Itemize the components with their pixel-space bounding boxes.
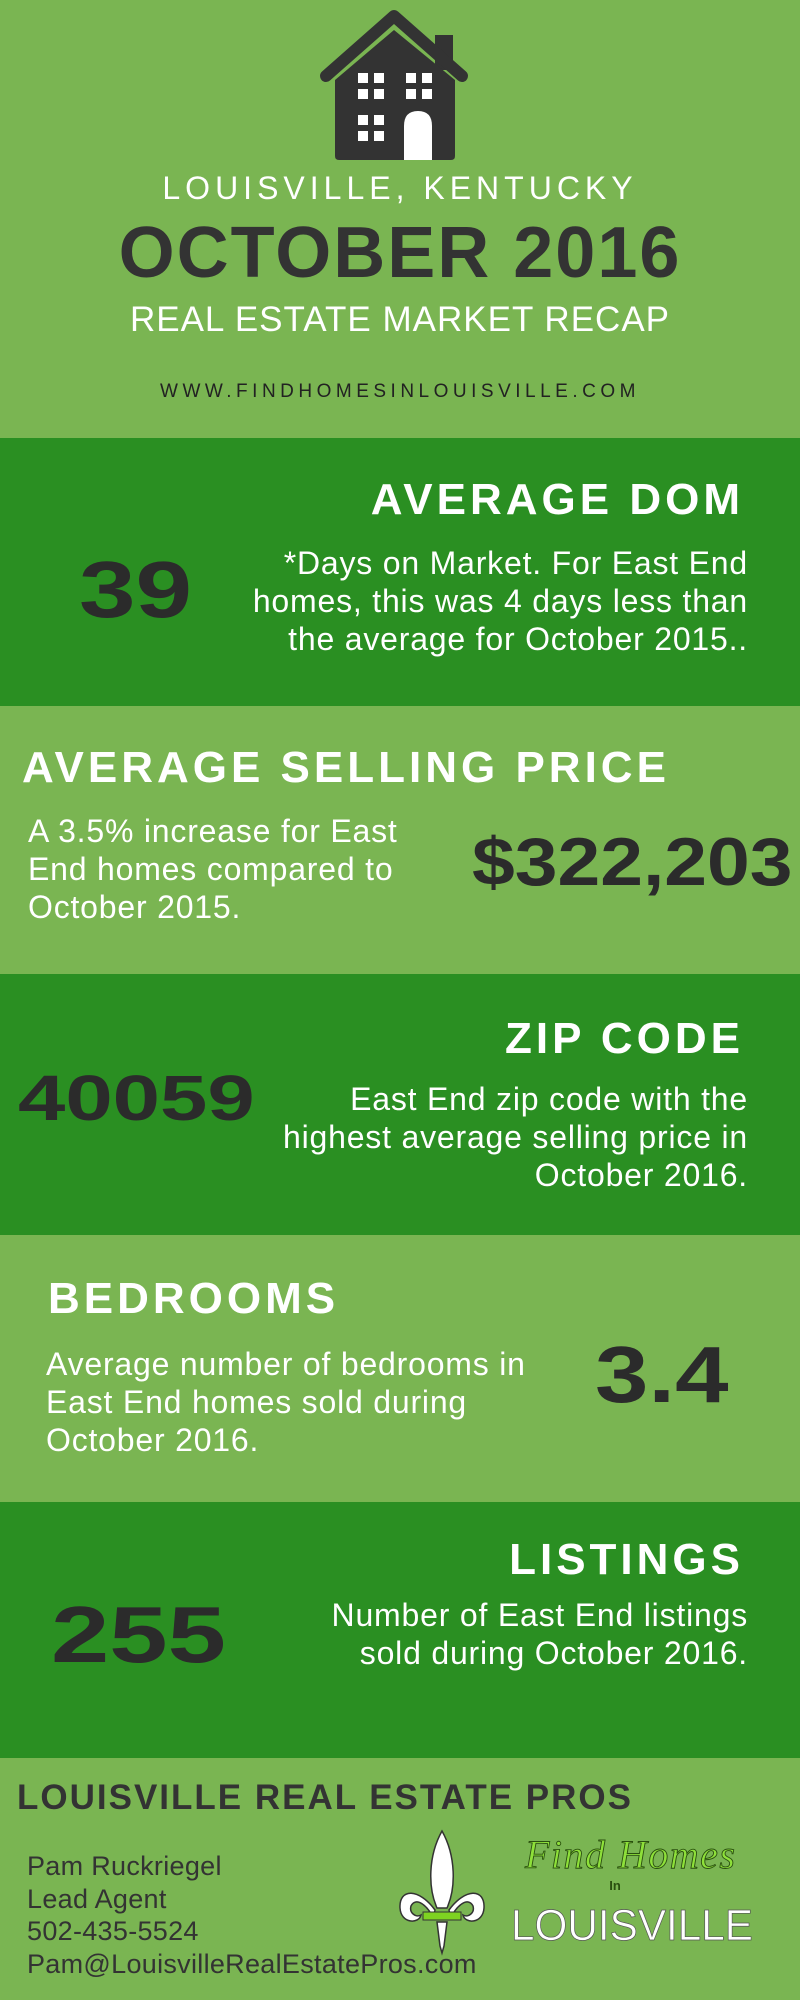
text: [46, 1346, 526, 1458]
icon: fleur-de-lis: [400, 1831, 484, 1953]
text: [332, 1597, 748, 1671]
icon: house: [320, 10, 468, 160]
text: October 2016.: [46, 1422, 259, 1458]
text: Number of East End listings: [332, 1597, 748, 1633]
number: 3.4: [595, 1330, 728, 1419]
text: [253, 545, 748, 657]
heading: ZIP CODE: [505, 1014, 744, 1063]
website: WWW.FINDHOMESINLOUISVILLE.COM: [160, 381, 640, 402]
number: 39: [79, 545, 192, 634]
heading: LISTINGS: [509, 1535, 744, 1584]
text: highest average selling price in: [283, 1119, 748, 1155]
text: Average number of bedrooms in: [46, 1346, 526, 1382]
contact info: 502-435-5524: [27, 1916, 199, 1946]
footer heading: LOUISVILLE REAL ESTATE PROS: [17, 1778, 633, 1817]
text: *Days on Market. For East End: [284, 545, 748, 581]
text: the average for October 2015..: [288, 621, 748, 657]
text: October 2015.: [28, 889, 241, 925]
footer panel: [0, 1754, 800, 2000]
panel: zip code: [0, 974, 800, 1235]
text: homes, this was 4 days less than: [253, 583, 748, 619]
panel: average DOM: [0, 438, 800, 706]
number: 255: [51, 1590, 226, 1679]
contact info: Pam Ruckriegel: [27, 1851, 222, 1881]
number: 40059: [18, 1062, 255, 1134]
heading: AVERAGE DOM: [371, 475, 744, 524]
heading: BEDROOMS: [48, 1274, 339, 1323]
heading: AVERAGE SELLING PRICE: [22, 743, 670, 792]
panel: bedrooms: [0, 1235, 800, 1502]
logo: [399, 1830, 753, 1956]
number: $322,203: [472, 824, 792, 900]
header panel: [0, 0, 800, 438]
title: OCTOBER 2016: [119, 213, 681, 293]
panel: listings: [0, 1502, 800, 1754]
text: East End homes sold during: [46, 1384, 467, 1420]
contact info: Lead Agent: [27, 1884, 167, 1914]
text: End homes compared to: [28, 851, 393, 887]
logo: In: [609, 1878, 621, 1893]
panel: average selling price: [0, 706, 800, 974]
logo: LOUISVILLE: [511, 1901, 753, 1950]
text: East End zip code with the: [350, 1081, 748, 1117]
text: sold during October 2016.: [360, 1635, 748, 1671]
text: A 3.5% increase for East: [28, 813, 398, 849]
text: [283, 1081, 748, 1193]
contact info: [27, 1851, 477, 1978]
subtitle: REAL ESTATE MARKET RECAP: [130, 300, 670, 339]
text: [28, 813, 398, 925]
location heading: LOUISVILLE, KENTUCKY: [162, 170, 638, 206]
contact info: Pam@LouisvilleRealEstatePros.com: [27, 1948, 477, 1978]
logo text: Find Homes: [524, 1832, 735, 1877]
text: October 2016.: [535, 1157, 748, 1193]
